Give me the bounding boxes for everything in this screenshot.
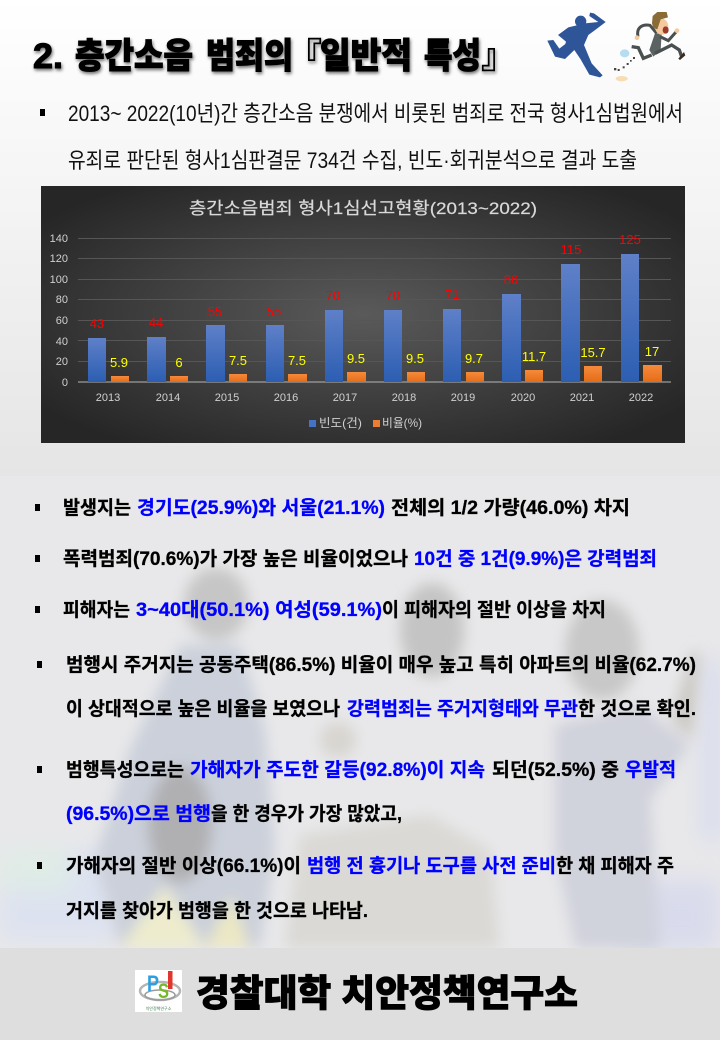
x axis labels: 2018	[392, 392, 416, 404]
finding: crime type: 10건 중 1건(9.9%)은 강력범죄	[414, 548, 657, 570]
frequency value labels: 70	[326, 288, 340, 303]
chart title: 층간소음범죄 형사1심선고현황(2013~2022)	[189, 199, 537, 218]
x axis labels: 2019	[451, 392, 475, 404]
logo: PSI: S	[158, 980, 169, 1003]
ratio value labels: 7.5	[288, 353, 306, 368]
finding: crime type: 폭력범죄(70.6%)가 가장 높은 비율이었으나	[63, 548, 408, 570]
ratio value labels: 7.5	[229, 353, 247, 368]
ratio value labels	[110, 344, 659, 370]
ratio value labels: 11.7	[522, 349, 546, 364]
logo: PSI: 치안정책연구소	[146, 1005, 172, 1011]
frequency value labels	[90, 232, 641, 331]
logo: PSI	[135, 970, 182, 1012]
finding: preparation: 가해자의 절반 이상(66.1%)이	[66, 855, 301, 877]
frequency value labels: 71	[445, 287, 459, 302]
frequency value labels: 86	[504, 272, 518, 287]
ratio value labels: 9.5	[347, 351, 365, 366]
x axis labels: 2020	[511, 392, 535, 404]
y axis labels: 60	[56, 315, 68, 327]
frequency value labels: 115	[561, 242, 581, 257]
ratio value labels: 9.5	[406, 351, 424, 366]
finding: residence: 한 것으로 확인.	[578, 698, 696, 720]
finding: crime type	[35, 548, 657, 570]
frequency value labels: 43	[90, 316, 104, 331]
intro line 2: 유죄로 판단된 형사1심판결문 734건 수집, 빈도·회귀분석으로 결과 도출	[68, 148, 637, 173]
gridlines	[78, 238, 671, 362]
title: 범죄의	[206, 37, 293, 76]
y axis labels: 0	[62, 377, 68, 389]
y axis labels: 140	[50, 233, 68, 245]
y axis labels: 20	[56, 356, 68, 368]
bar chart panel	[41, 186, 685, 443]
frequency value labels: 55	[208, 304, 222, 319]
logo: PSI: P	[147, 971, 159, 996]
legend: 비율(%)	[382, 416, 422, 430]
panel: blurred photo background	[0, 476, 720, 950]
y axis labels: 120	[50, 253, 68, 265]
finding: offense traits: 범행특성으로는	[66, 759, 184, 781]
intro bullet block	[40, 101, 683, 173]
finding: residence: 강력범죄는 주거지형태와 무관	[347, 698, 578, 720]
right figure	[565, 600, 639, 700]
legend	[309, 416, 422, 430]
title: 『	[287, 37, 322, 76]
finding: offense traits: 되던(52.5%) 중	[492, 759, 619, 781]
finding: preparation	[37, 855, 674, 922]
finding: preparation: 범행 전 흉기나 도구를 사전 준비	[307, 855, 556, 877]
finding: preparation: 거지를 찾아가 범행을 한 것으로 나타남.	[66, 900, 368, 922]
icon: running businessman	[614, 12, 685, 81]
frequency value labels: 44	[149, 315, 163, 330]
x axis labels: 2014	[156, 392, 180, 404]
title: 일반적	[320, 37, 412, 76]
ratio value labels: 9.7	[465, 351, 483, 366]
ratio value labels: 5.9	[110, 355, 128, 370]
top header background	[0, 0, 720, 476]
finding: preparation: 한 채 피해자 주	[556, 855, 674, 877]
footer organisation name: 경찰대학 치안정책연구소	[196, 973, 578, 1014]
finding: offense traits: (96.5%)으로 범행	[66, 803, 211, 825]
ratio value labels: 15.7	[580, 345, 606, 360]
x axis labels: 2022	[629, 392, 653, 404]
title: 특성	[424, 37, 481, 76]
finding: location	[35, 497, 630, 519]
title	[33, 37, 516, 76]
speed marks	[614, 57, 635, 71]
y axis labels	[50, 233, 68, 389]
hand	[320, 722, 356, 758]
title: 층간소음	[75, 37, 193, 76]
title: 』	[481, 37, 516, 76]
finding: victims: 3~40대(50.1%) 여성(59.1%)	[136, 599, 382, 621]
x axis labels	[96, 392, 653, 404]
finding: residence: 범행시 주거지는 공동주택(86.5%) 비율이 매우 높고 특히 아파트의 비율(62.7%)	[66, 654, 696, 676]
finding: residence: 이 상대적으로 높은 비율을 보였으나	[66, 698, 340, 720]
middle figure	[400, 583, 464, 677]
x axis labels: 2021	[570, 392, 594, 404]
y axis labels: 80	[56, 294, 68, 306]
footer band	[0, 948, 720, 1040]
y axis labels: 40	[56, 336, 68, 348]
x axis labels: 2015	[215, 392, 239, 404]
finding: offense traits	[37, 759, 676, 825]
ratio bars	[111, 365, 662, 382]
ratio value labels: 17	[645, 344, 659, 359]
finding: victims: 이 피해자의 절반 이상을 차지	[382, 599, 606, 621]
finding: victims: 피해자는	[63, 599, 130, 621]
finding: victims	[35, 599, 606, 621]
frequency value labels: 70	[386, 288, 400, 303]
finding: location: 전체의 1/2 가량(46.0%) 차지	[391, 497, 630, 519]
findings text block	[35, 497, 696, 922]
ratio value labels: 6	[175, 355, 183, 370]
finding: offense traits: 우발적	[625, 759, 676, 781]
legend: 빈도(건)	[319, 416, 362, 430]
icon: blue running silhouette	[547, 13, 606, 77]
x axis labels: 2016	[274, 392, 298, 404]
y axis labels: 100	[50, 274, 68, 286]
finding: location: 발생지는	[63, 497, 131, 519]
frequency value labels: 125	[619, 232, 641, 247]
frequency bars	[88, 254, 639, 382]
finding: offense traits: 가해자가 주도한 갈등(92.8%)이 지속	[190, 759, 485, 781]
finding: location: 경기도(25.9%)와 서울(21.1%)	[137, 497, 385, 519]
x axis labels: 2017	[333, 392, 357, 404]
finding: offense traits: 을 한 경우가 가장 많았고,	[211, 803, 402, 825]
finding: residence	[37, 654, 696, 720]
left figure	[184, 568, 248, 640]
frequency value labels: 55	[267, 304, 281, 319]
x axis labels: 2013	[96, 392, 120, 404]
title: 2.	[33, 37, 63, 76]
